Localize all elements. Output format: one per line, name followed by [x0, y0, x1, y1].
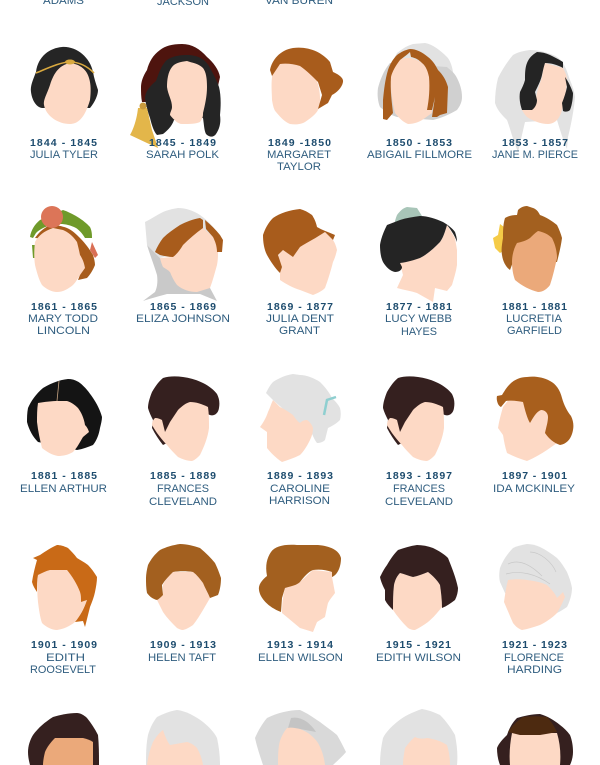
hair: [380, 545, 458, 610]
face: [34, 228, 85, 292]
hair: [31, 47, 98, 108]
face: [512, 231, 557, 292]
portrait: Lucy Webb Hayes: [380, 207, 457, 302]
face: [278, 232, 337, 295]
face: [157, 572, 210, 630]
face and ear: [152, 402, 209, 461]
caption: Frances Cleveland (1885): CLEVELAND: [149, 496, 217, 508]
portrait: Sarah Polk: [130, 44, 221, 148]
darker curl: [288, 718, 316, 732]
face: [403, 737, 450, 765]
caption: Frances Cleveland (1885): 1885 - 1889: [150, 470, 216, 482]
caption: Mary Todd Lincoln: 1861 - 1865: [31, 301, 97, 313]
face: [167, 61, 207, 124]
yellow flower: [493, 224, 505, 253]
caption: Helen Taft: HELEN TAFT: [148, 652, 216, 664]
hair: [32, 545, 97, 627]
caption: Lucretia Garfield: 1881 - 1881: [502, 301, 567, 313]
caption: Florence Harding: 1921 - 1923: [502, 639, 567, 651]
neck and face: [397, 225, 457, 302]
curly grey hair: [266, 374, 341, 443]
face: [278, 728, 325, 765]
face: [391, 58, 432, 124]
caption: Lucy Webb Hayes: LUCY WEBB: [385, 313, 452, 325]
caption: Caroline Harrison: CAROLINE: [270, 483, 330, 495]
caption: Ida McKinley: [493, 470, 576, 495]
hair: [148, 376, 219, 445]
caption: Eliza Johnson: [136, 301, 230, 325]
face: [147, 730, 203, 765]
portrait: Helen Taft: [146, 544, 221, 630]
face: [37, 570, 87, 630]
caption: Ellen Wilson: [258, 639, 343, 664]
caption: Edith Roosevelt: 1901 - 1909: [31, 639, 97, 651]
face: [44, 63, 91, 124]
portrait: Edith Wilson: [380, 545, 458, 630]
caption: Eliza Johnson: 1865 - 1869: [150, 301, 216, 313]
caption: Ellen Arthur: 1881 - 1885: [31, 470, 97, 482]
face: [260, 400, 313, 462]
portrait: Julia Tyler: [31, 47, 98, 124]
caption: Frances Cleveland (1893): 1893 - 1897: [386, 470, 452, 482]
hair: [146, 544, 221, 600]
headband ornament: [65, 60, 75, 64]
caption: Sarah Polk: SARAH POLK: [146, 149, 220, 161]
caption: Julia Tyler: [30, 137, 98, 161]
veil lower: [143, 245, 217, 301]
veil upper: [388, 43, 455, 78]
face: [498, 398, 557, 461]
black hair with bun: [380, 216, 457, 272]
caption: Jane Pierce: [492, 137, 578, 161]
caption: Edith Roosevelt: EDITH: [46, 652, 85, 664]
hair: [502, 206, 562, 270]
portrait: Frances Cleveland (1885): [148, 376, 219, 461]
veil upper: [145, 208, 222, 258]
hair and ringlets: [383, 49, 448, 120]
caption: Ellen Arthur: [20, 470, 107, 495]
hair: [263, 209, 335, 273]
portrait: Eliza Johnson: [143, 208, 223, 301]
caption: Caroline Harrison: HARRISON: [269, 495, 330, 507]
caption: Frances Cleveland (1893): [385, 470, 453, 508]
face: [393, 572, 442, 630]
face: [160, 228, 218, 292]
caption: Sarah Polk: [146, 137, 220, 161]
hair wave lines: [506, 552, 556, 584]
caption: Edith Roosevelt: [30, 639, 97, 676]
portrait: Jane Pierce: [495, 50, 575, 152]
face and ear: [387, 402, 444, 461]
caption: Mary Todd Lincoln: [28, 301, 98, 337]
portrait: cropped dark hair, darker skin: [28, 713, 99, 765]
caption: Frances Cleveland (1893): CLEVELAND: [385, 496, 453, 508]
portrait: cropped pale grey hair: [146, 710, 220, 765]
caption: Mary Todd Lincoln: LINCOLN: [37, 325, 90, 337]
caption: Florence Harding: FLORENCE: [504, 652, 564, 664]
portrait: Caroline Harrison: [260, 374, 341, 462]
portrait: cropped silver hair: [255, 710, 346, 765]
caption: Julia Dent Grant: [266, 301, 334, 337]
caption: Ellen Wilson: ELLEN WILSON: [258, 652, 343, 664]
caption: Frances Cleveland (1885): FRANCES: [157, 483, 209, 495]
caption: Jane Pierce: JANE M. PIERCE: [492, 149, 578, 161]
portrait: Julia Dent Grant: [263, 209, 337, 295]
caption: Lucy Webb Hayes: HAYES: [401, 326, 437, 338]
gold tassel: [130, 108, 158, 148]
coral rose: [41, 206, 63, 228]
veil lower: [378, 63, 462, 120]
caption: Edith Wilson: 1915 - 1921: [386, 639, 451, 651]
portrait: Florence Harding: [499, 544, 572, 630]
caption: Margaret Taylor: MARGARET: [267, 149, 331, 161]
hair: [270, 48, 343, 109]
face: [510, 733, 560, 765]
caption: Abigail Fillmore: [367, 137, 472, 161]
hair: [28, 713, 99, 765]
caption: Julia Dent Grant: JULIA DENT: [266, 313, 334, 325]
cropped names from the previous row: [43, 0, 333, 8]
caption: Edith Wilson: [376, 639, 461, 664]
hair: [35, 225, 95, 280]
caption: Julia Tyler: 1844 - 1845: [30, 137, 97, 149]
maroon headdress: [141, 44, 220, 102]
hair: [497, 714, 573, 765]
hair parting: [57, 381, 59, 401]
portrait: Abigail Fillmore: [378, 43, 462, 124]
black hair: [27, 379, 102, 450]
caption: Ellen Wilson: 1913 - 1914: [267, 639, 333, 651]
caption: Abigail Fillmore: ABIGAIL FILLMORE: [367, 149, 472, 161]
portrait: Margaret Taylor: [270, 48, 343, 124]
caption: Lucy Webb Hayes: [385, 301, 452, 338]
coral side flower: [90, 242, 98, 258]
grey curly hair: [499, 544, 572, 613]
caption: Ida McKinley: IDA MCKINLEY: [493, 483, 576, 495]
caption: Lucy Webb Hayes: 1877 - 1881: [386, 301, 452, 313]
portrait: Lucretia Garfield: [493, 206, 562, 292]
face: [37, 401, 89, 456]
face: [282, 570, 335, 632]
face: [504, 579, 565, 630]
gold headband: [36, 62, 94, 73]
caption: Margaret Taylor: TAYLOR: [277, 161, 321, 173]
caption: Ida McKinley: 1897 - 1901: [502, 470, 567, 482]
fringe: [508, 716, 557, 735]
portrait: Mary Todd Lincoln: [30, 206, 98, 292]
caption: Julia Dent Grant: 1869 - 1877: [267, 301, 333, 313]
caption: Eliza Johnson: ELIZA JOHNSON: [136, 313, 230, 325]
hair: [383, 376, 454, 445]
caption: Caroline Harrison: 1889 - 1893: [267, 470, 333, 482]
caption: Lucretia Garfield: LUCRETIA: [506, 313, 563, 325]
hair: [255, 710, 346, 765]
portrait: cropped brown curled hair: [497, 714, 573, 765]
green wreath: [30, 210, 92, 258]
caption: Abigail Fillmore: 1850 - 1853: [386, 137, 452, 149]
caption: Julia Tyler: JULIA TYLER: [30, 149, 98, 161]
portrait: Edith Roosevelt: [32, 545, 97, 630]
caption: Lucretia Garfield: GARFIELD: [507, 325, 562, 337]
face: [43, 738, 93, 765]
hair: [259, 545, 341, 612]
caption: Helen Taft: [148, 639, 216, 664]
caption: Lucretia Garfield: [502, 301, 567, 337]
portrait: Ida McKinley: [497, 377, 573, 461]
caption: Helen Taft: 1909 - 1913: [150, 639, 216, 651]
hair: [155, 218, 223, 257]
veil: [495, 50, 575, 152]
portrait: Frances Cleveland (1893): [383, 376, 454, 461]
face: [272, 63, 320, 124]
caption: Frances Cleveland (1893): FRANCES: [393, 483, 445, 495]
black curls: [145, 55, 221, 137]
hair: [146, 710, 220, 765]
caption: Julia Dent Grant: GRANT: [279, 325, 320, 337]
portrait: Ellen Arthur: [27, 379, 102, 456]
caption: Margaret Taylor: 1849 -1850: [268, 137, 331, 149]
caption: Ellen Arthur: ELLEN ARTHUR: [20, 483, 107, 495]
caption: Florence Harding: HARDING: [507, 664, 562, 676]
caption: Margaret Taylor: [267, 137, 331, 173]
caption: Sarah Polk: 1845 - 1849: [149, 137, 216, 149]
caption: Frances Cleveland (1885): [149, 470, 217, 508]
caption: Jane Pierce: 1853 - 1857: [502, 137, 568, 149]
black hair: [520, 52, 563, 110]
hair: [380, 709, 457, 765]
blue hair ornament: [324, 397, 336, 415]
portrait: cropped white hair: [380, 709, 457, 765]
tiara: [393, 207, 422, 235]
curly hair: [497, 377, 573, 445]
caption: Edith Wilson: EDITH WILSON: [376, 652, 461, 664]
black ringlet right: [562, 77, 573, 112]
caption: Florence Harding: [502, 639, 567, 676]
caption: Edith Roosevelt: ROOSEVELT: [30, 664, 96, 676]
portrait: Ellen Wilson: [259, 545, 341, 632]
caption: Caroline Harrison: [267, 470, 333, 507]
face: [522, 63, 567, 124]
tassel knot: [140, 102, 146, 110]
caption: Mary Todd Lincoln: MARY TODD: [28, 313, 98, 325]
